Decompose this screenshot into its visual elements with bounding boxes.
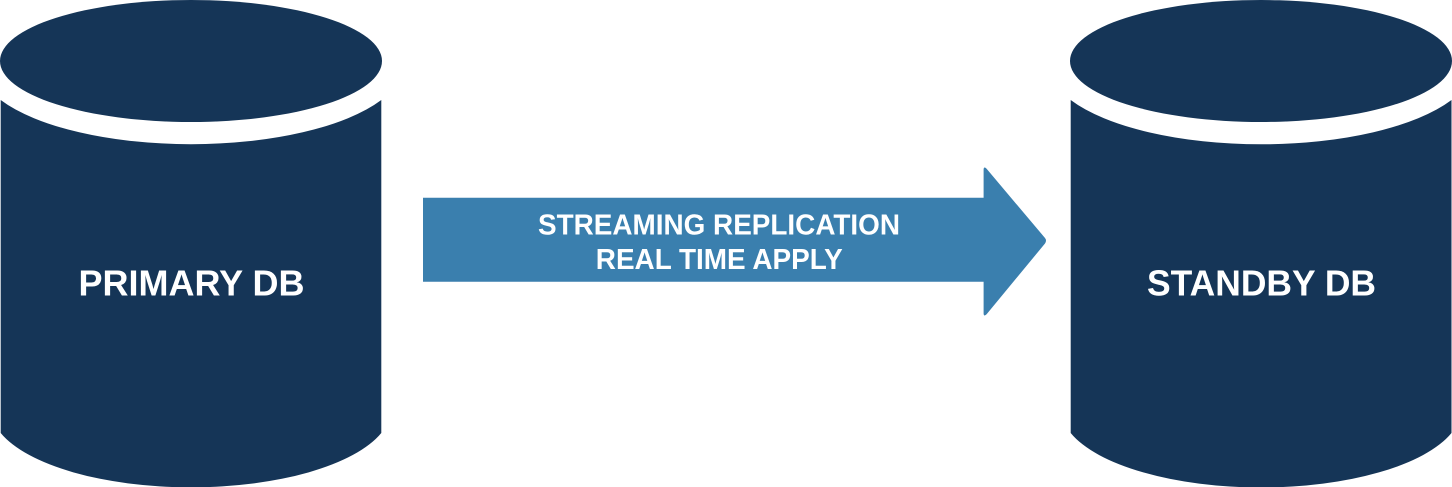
arrow label: streaming replication: STREAMING REPLICATION — [538, 210, 900, 242]
standby database cylinder — [1070, 0, 1452, 487]
replication arrow — [423, 168, 1046, 315]
primary database cylinder — [0, 0, 382, 487]
label: primary db: PRIMARY DB — [78, 262, 304, 304]
label: standby db: STANDBY DB — [1147, 262, 1376, 304]
arrow label: real time apply: REAL TIME APPLY — [596, 244, 843, 276]
